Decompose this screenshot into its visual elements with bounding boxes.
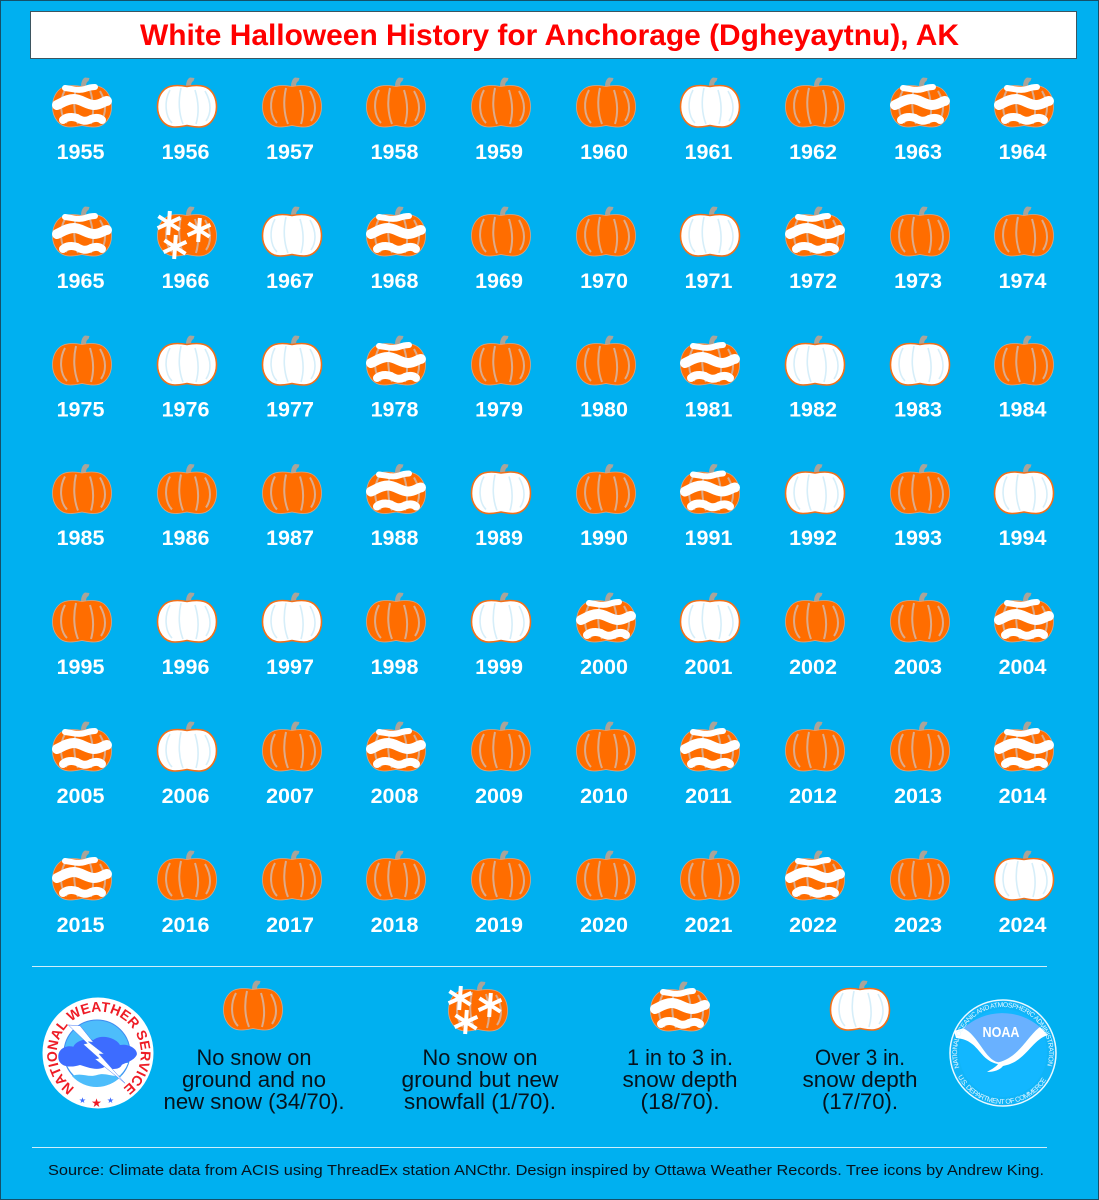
2012 xyxy=(786,722,844,808)
1979 xyxy=(472,336,530,422)
1976 xyxy=(158,336,216,422)
2023 xyxy=(890,850,950,937)
2010 xyxy=(576,722,636,808)
1964 xyxy=(994,78,1054,164)
legend: no snow: ground and no xyxy=(182,1067,326,1092)
1980: 1980 xyxy=(580,398,628,422)
1960 xyxy=(576,78,636,164)
2013 xyxy=(890,722,950,808)
pumpkin grid xyxy=(52,78,1054,937)
2020 xyxy=(576,850,636,937)
2020: 2020 xyxy=(580,913,628,937)
legend xyxy=(164,980,918,1114)
2017 xyxy=(262,850,322,937)
1973 xyxy=(890,206,950,293)
1972: 1972 xyxy=(789,269,837,293)
1970 xyxy=(576,206,636,293)
1989: 1989 xyxy=(475,526,523,550)
1955: 1955 xyxy=(57,140,104,164)
1985: 1985 xyxy=(57,526,104,550)
1983: 1983 xyxy=(894,398,942,422)
1968: 1968 xyxy=(371,269,418,293)
1974 xyxy=(994,206,1054,293)
NWS logo: ★ xyxy=(79,1096,86,1105)
1974: 1974 xyxy=(999,269,1046,293)
2003: 2003 xyxy=(894,655,942,679)
legend: no snow: No snow on xyxy=(196,1045,312,1070)
1982 xyxy=(786,336,844,422)
legend: over 3 inches: (17/70). xyxy=(822,1089,898,1114)
1996: 1996 xyxy=(162,655,209,679)
1988 xyxy=(366,464,426,550)
1994 xyxy=(994,464,1054,550)
2022 xyxy=(786,850,844,937)
1994: 1994 xyxy=(999,526,1046,550)
2015: 2015 xyxy=(57,913,104,937)
2018: 2018 xyxy=(371,913,418,937)
title: White Halloween History for Anchorage (Dgheyaytnu), AK xyxy=(140,19,959,52)
1969: 1969 xyxy=(475,269,523,293)
2007 xyxy=(262,722,322,808)
2004: 2004 xyxy=(999,655,1046,679)
1970: 1970 xyxy=(580,269,628,293)
legend: no snow: new snow (34/70). xyxy=(164,1089,344,1114)
NOAA logo: NOAA xyxy=(982,1025,1020,1041)
1957 xyxy=(262,78,322,164)
legend: over 3 inches xyxy=(802,980,918,1114)
legend: 1 to 3 inches: 1 in to 3 in. xyxy=(627,1045,733,1070)
legend: new snowfall only: ground but new xyxy=(402,1067,559,1092)
1997: 1997 xyxy=(266,655,314,679)
NOAA logo xyxy=(949,999,1057,1107)
1963: 1963 xyxy=(894,140,942,164)
2022: 2022 xyxy=(789,913,837,937)
2002: 2002 xyxy=(789,655,837,679)
2004 xyxy=(994,592,1054,679)
1966: 1966 xyxy=(162,269,209,293)
1996 xyxy=(158,592,216,679)
NWS logo: NATIONAL WEATHER SERVICE xyxy=(47,1002,151,1095)
2014: 2014 xyxy=(999,784,1046,808)
2006: 2006 xyxy=(162,784,209,808)
1992: 1992 xyxy=(789,526,837,550)
1964: 1964 xyxy=(999,140,1046,164)
1976: 1976 xyxy=(162,398,209,422)
1999: 1999 xyxy=(475,655,523,679)
legend: new snowfall only xyxy=(402,982,559,1114)
1989 xyxy=(472,464,530,550)
source note: Source: Climate data from ACIS using ThreadEx station ANCthr. Design inspired by Ottawa Weather Records. Tree icons by Andrew King. xyxy=(48,1162,1044,1179)
1961: 1961 xyxy=(685,140,732,164)
1962: 1962 xyxy=(789,140,837,164)
2016 xyxy=(158,850,216,937)
1965: 1965 xyxy=(57,269,104,293)
2024 xyxy=(994,850,1054,937)
1991: 1991 xyxy=(685,526,732,550)
1998: 1998 xyxy=(371,655,418,679)
1955 xyxy=(52,78,112,164)
2000 xyxy=(576,592,636,679)
1990: 1990 xyxy=(580,526,628,550)
1963 xyxy=(890,78,950,164)
2024: 2024 xyxy=(999,913,1046,937)
1959 xyxy=(472,78,530,164)
1956 xyxy=(158,78,216,164)
1969 xyxy=(472,206,530,293)
1967: 1967 xyxy=(266,269,314,293)
2001 xyxy=(680,592,740,679)
2000: 2000 xyxy=(580,655,628,679)
2003 xyxy=(890,592,950,679)
1980 xyxy=(576,336,636,422)
1965 xyxy=(52,206,112,293)
legend: no snow xyxy=(164,980,344,1114)
NOAA logo: NATIONAL OCEANIC AND ATMOSPHERIC ADMINISTRATION xyxy=(952,1002,1054,1068)
legend: new snowfall only: No snow on xyxy=(422,1045,538,1070)
1967 xyxy=(262,206,322,293)
1999 xyxy=(472,592,530,679)
1998 xyxy=(366,592,426,679)
2017: 2017 xyxy=(266,913,314,937)
1983 xyxy=(890,336,950,422)
2007: 2007 xyxy=(266,784,314,808)
2021: 2021 xyxy=(685,913,732,937)
NWS logo: ★ xyxy=(107,1096,114,1105)
2011 xyxy=(680,722,740,808)
1982: 1982 xyxy=(789,398,837,422)
1961 xyxy=(680,78,740,164)
2009 xyxy=(472,722,530,808)
2019 xyxy=(472,850,530,937)
1995: 1995 xyxy=(57,655,104,679)
1985 xyxy=(52,464,112,550)
1979: 1979 xyxy=(475,398,523,422)
1981: 1981 xyxy=(685,398,732,422)
1958 xyxy=(366,78,426,164)
2023: 2023 xyxy=(894,913,942,937)
1984: 1984 xyxy=(999,398,1046,422)
2018 xyxy=(366,850,426,937)
2009: 2009 xyxy=(475,784,523,808)
2002 xyxy=(786,592,844,679)
1971 xyxy=(680,206,740,293)
1987: 1987 xyxy=(266,526,314,550)
1972 xyxy=(786,206,844,293)
1986: 1986 xyxy=(162,526,209,550)
1992 xyxy=(786,464,844,550)
2012: 2012 xyxy=(789,784,837,808)
2013: 2013 xyxy=(894,784,942,808)
2010: 2010 xyxy=(580,784,628,808)
title xyxy=(30,12,1076,58)
2005: 2005 xyxy=(57,784,104,808)
1987 xyxy=(262,464,322,550)
1968 xyxy=(366,206,426,293)
1957: 1957 xyxy=(266,140,314,164)
1986 xyxy=(158,464,216,550)
1960: 1960 xyxy=(580,140,628,164)
legend: over 3 inches: snow depth xyxy=(802,1067,918,1092)
1978: 1978 xyxy=(371,398,418,422)
2021 xyxy=(680,850,740,937)
2001: 2001 xyxy=(685,655,732,679)
1977 xyxy=(262,336,322,422)
1993 xyxy=(890,464,950,550)
1956: 1956 xyxy=(162,140,209,164)
legend: 1 to 3 inches xyxy=(622,982,738,1114)
1984 xyxy=(994,336,1054,422)
1958: 1958 xyxy=(371,140,418,164)
1995 xyxy=(52,592,112,679)
2014 xyxy=(994,722,1054,808)
1975: 1975 xyxy=(57,398,104,422)
1997 xyxy=(262,592,322,679)
1990 xyxy=(576,464,636,550)
NWS logo: ★ xyxy=(91,1096,102,1110)
1993: 1993 xyxy=(894,526,942,550)
legend: 1 to 3 inches: (18/70). xyxy=(640,1089,720,1114)
2006 xyxy=(158,722,216,808)
1991 xyxy=(680,464,740,550)
2008: 2008 xyxy=(371,784,418,808)
1988: 1988 xyxy=(371,526,418,550)
1977: 1977 xyxy=(266,398,314,422)
1966 xyxy=(157,206,216,293)
1971: 1971 xyxy=(685,269,732,293)
1959: 1959 xyxy=(475,140,523,164)
1978 xyxy=(366,336,426,422)
1981 xyxy=(680,336,740,422)
2011: 2011 xyxy=(685,784,732,808)
NOAA logo: U.S. DEPARTMENT OF COMMERCE xyxy=(958,1074,1046,1104)
2005 xyxy=(52,722,112,808)
1975 xyxy=(52,336,112,422)
legend: 1 to 3 inches: snow depth xyxy=(622,1067,738,1092)
1973: 1973 xyxy=(894,269,942,293)
2008 xyxy=(366,722,426,808)
2015 xyxy=(52,850,112,937)
legend: over 3 inches: Over 3 in. xyxy=(815,1045,905,1070)
2016: 2016 xyxy=(162,913,209,937)
1962 xyxy=(786,78,844,164)
legend: new snowfall only: snowfall (1/70). xyxy=(404,1089,556,1114)
2019: 2019 xyxy=(475,913,523,937)
